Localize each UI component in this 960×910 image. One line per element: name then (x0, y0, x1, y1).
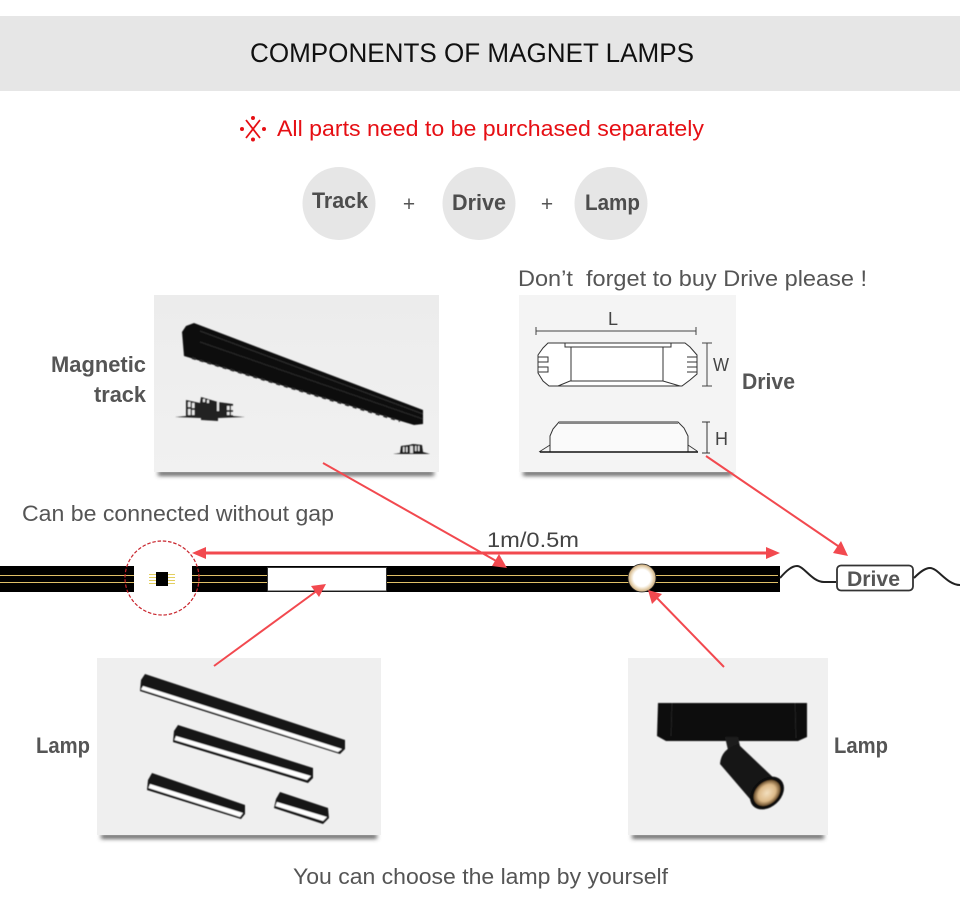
formula: track plus drive plus lamp (302, 167, 648, 240)
panel: magnetic track photo (154, 295, 439, 476)
label: lamp right: Lamp (834, 733, 888, 758)
length label: 1m/0.5m (487, 529, 579, 552)
badge: Drive: Drive (452, 190, 506, 215)
plus sign: + (541, 193, 553, 216)
label: magnetic track: track (94, 382, 147, 407)
label: magnetic track (51, 352, 147, 407)
dimension W (702, 343, 729, 386)
title banner: COMPONENTS OF MAGNET LAMPS (250, 38, 694, 68)
lamp slot: spot (628, 564, 656, 592)
arrow: drive panel to drive box (706, 456, 848, 556)
mounting brackets small (393, 444, 430, 454)
arrow: track panel to track (323, 463, 507, 568)
icon: reference mark (240, 116, 266, 142)
arrow: dimension span (192, 547, 780, 559)
arrow: spot lamp to slot (648, 590, 724, 667)
linear lamp 4 (274, 792, 329, 824)
track profile (182, 323, 423, 425)
panel: spot lamp photo (628, 658, 828, 838)
cable and drive box (780, 566, 960, 591)
drive top view (538, 343, 697, 386)
connector detail (125, 541, 199, 615)
badge: Lamp: Lamp (585, 190, 640, 215)
dimension H: H (715, 429, 728, 449)
note: don't forget drive: Don’t forget to buy Drive please ! (518, 266, 867, 291)
linear lamp 3 (147, 773, 245, 819)
lamp slot: linear (268, 568, 386, 591)
label: magnetic track: Magnetic (51, 352, 146, 377)
dimension L: L (608, 309, 618, 329)
panel: drive diagram (519, 295, 736, 476)
arrow: linear lamp to slot (214, 584, 326, 666)
badge: Drive (442, 167, 516, 240)
note: choose the lamp: You can choose the lamp by yourself (293, 864, 669, 889)
plus sign: + (403, 193, 415, 216)
cable and drive box: Drive (847, 568, 900, 591)
spot lamp body (657, 703, 807, 816)
drive side view (539, 422, 698, 452)
badge: Track (302, 167, 376, 240)
label: lamp left: Lamp (36, 733, 90, 758)
panel: linear lamps photo (97, 658, 381, 838)
track diagram (0, 541, 780, 615)
title banner (0, 16, 960, 91)
badge: Lamp (574, 167, 648, 240)
dimension H (702, 422, 728, 453)
label: drive: Drive (742, 369, 795, 394)
dimension W: W (713, 355, 729, 375)
mounting brackets large (175, 397, 245, 421)
notice: all parts purchased separately: All parts need to be purchased separately (277, 116, 704, 141)
linear lamp 2 (173, 725, 313, 783)
dimension L (536, 309, 696, 335)
linear lamp 1 (140, 674, 345, 754)
note: connected without gap: Can be connected without gap (22, 501, 334, 526)
badge: Track: Track (312, 188, 369, 213)
